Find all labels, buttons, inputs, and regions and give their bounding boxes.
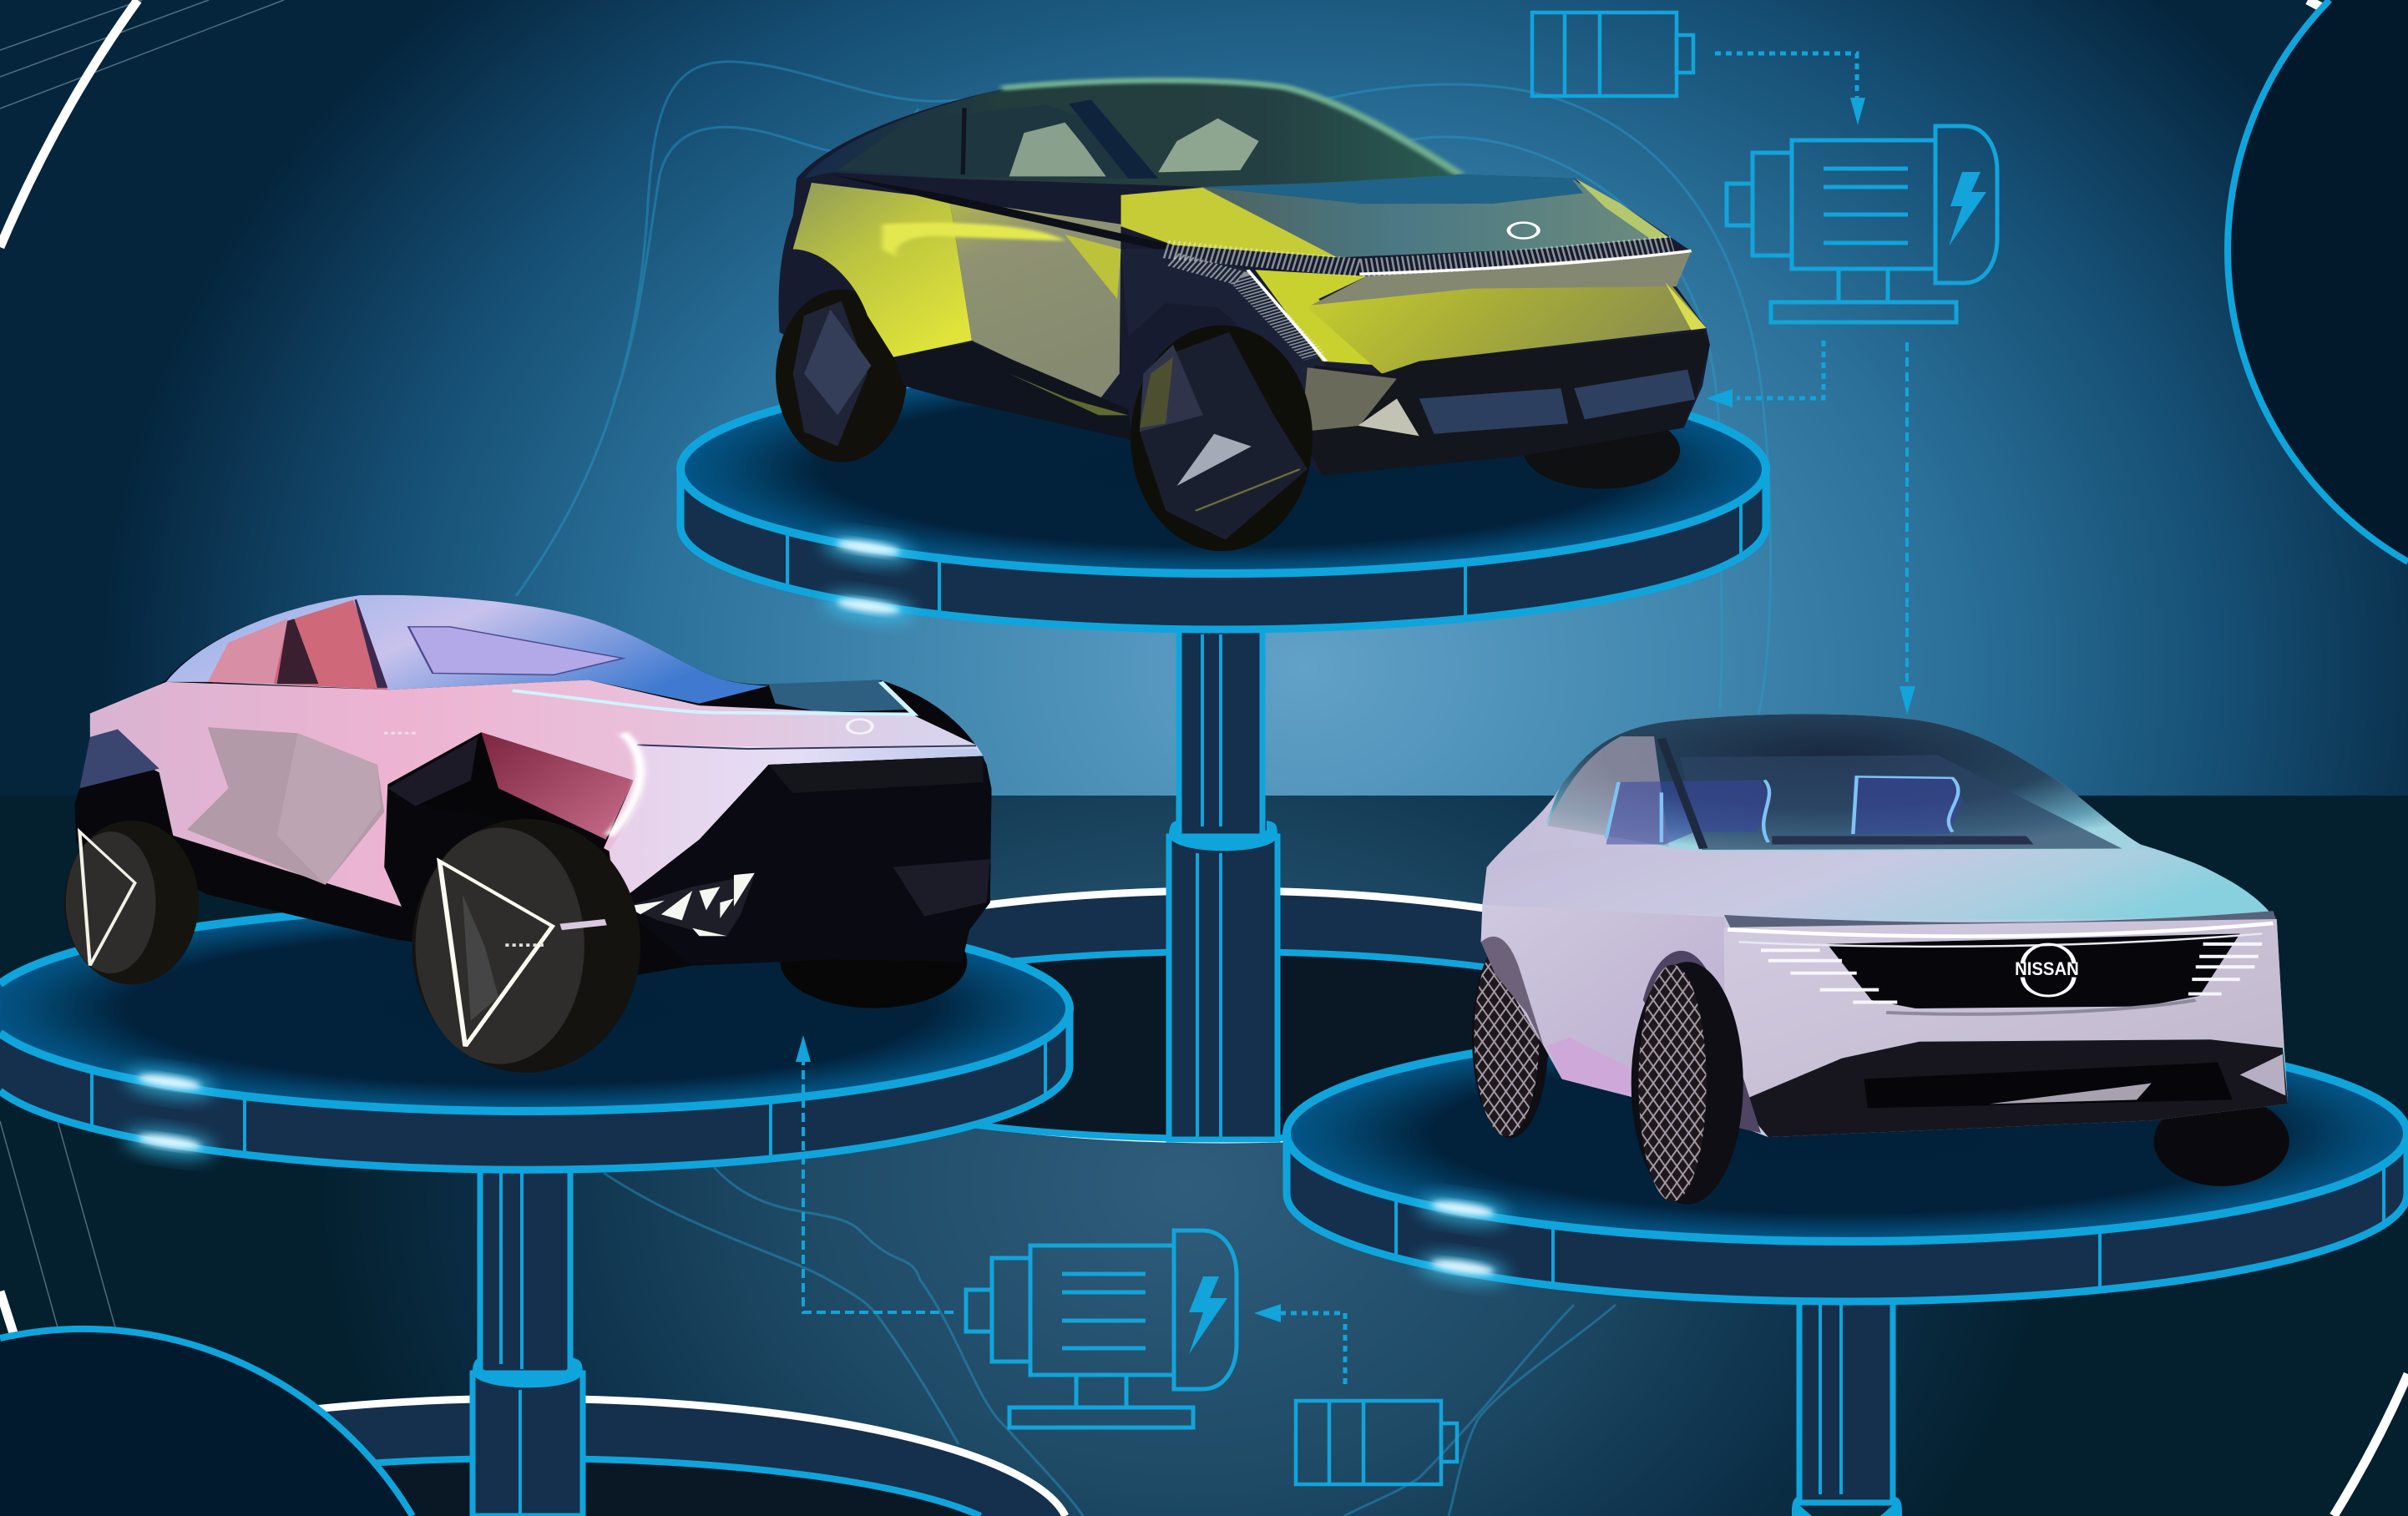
right column (1792, 1294, 1902, 1516)
light glows (122, 1064, 217, 1163)
car: white concept: NISSAN (2015, 959, 2079, 979)
arrows: motor to yellow car and white car (1706, 341, 1915, 715)
car: white concept (1472, 714, 2289, 1205)
icon: motor bottom (966, 1230, 1237, 1428)
background wall (0, 0, 2408, 796)
icon: motor top (1727, 126, 1997, 322)
base ring: left column (0, 1398, 1065, 1516)
left column (473, 1160, 583, 1516)
icon: battery bottom (1296, 1401, 1457, 1484)
corner circle top right outline (2228, 0, 2408, 562)
corner circle bottom left outline (0, 1329, 412, 1516)
background floor (0, 796, 2408, 1516)
car: yellow concept (776, 80, 1710, 551)
platform: left (0, 906, 1070, 1170)
platform: top (680, 365, 1766, 629)
platform: right (1287, 1026, 2407, 1301)
corner circle bottom left (0, 1329, 412, 1516)
base ring: centre column (714, 891, 1733, 1140)
corner circle top right (2228, 0, 2408, 562)
arrow: motor to pink car (796, 1035, 954, 1312)
light glows (1415, 1191, 1510, 1288)
arrow: battery to motor bottom (1254, 1304, 1345, 1384)
car: pink concept (64, 595, 991, 1073)
centre column (1169, 618, 1277, 1140)
thin circuit lines (516, 62, 1771, 1516)
arrow: battery to motor top (1715, 53, 1865, 125)
thin white corner lines (0, 0, 284, 1327)
light glows (821, 530, 916, 627)
icon: battery top (1532, 13, 1693, 96)
